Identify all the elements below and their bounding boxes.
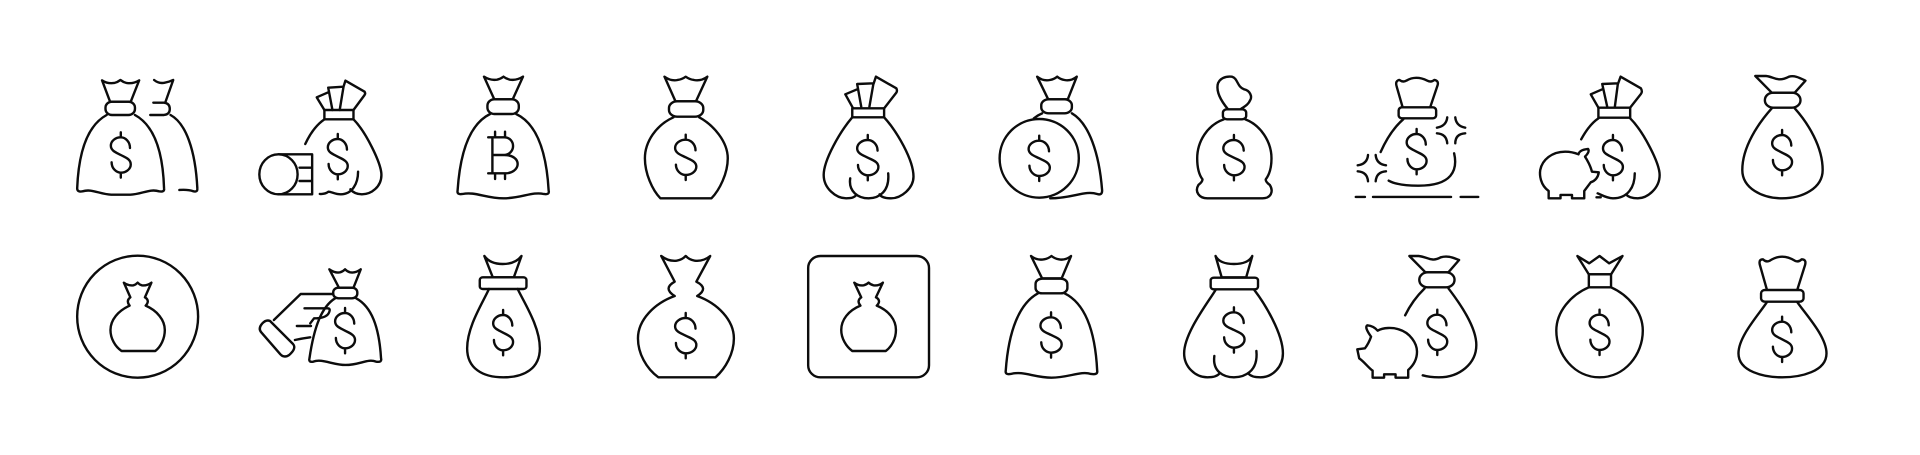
- icon: money bag with piggy bank: [1357, 256, 1476, 378]
- icon: bag with banknotes: [824, 77, 913, 198]
- icon: oval money bag with crown top: [1556, 256, 1643, 377]
- icon: hand holding money bag: [260, 269, 381, 365]
- icon: bag with large coin: [1000, 77, 1102, 198]
- icon: bag in rounded square: [808, 256, 929, 377]
- icon: bag with banknotes and piggy bank: [1540, 77, 1660, 198]
- icon: narrow money bag: [467, 256, 540, 377]
- icon: tied sack: [1197, 77, 1272, 198]
- icon: round money bag: [645, 77, 728, 198]
- icon: wide money bag: [638, 256, 734, 377]
- icon: squat money bag: [1738, 257, 1826, 377]
- icon: two money bags: [77, 80, 197, 195]
- icon: flared money bag: [1006, 256, 1097, 378]
- icon: teardrop money bag: [1742, 76, 1823, 198]
- icon: bag in circle: [77, 256, 198, 378]
- icon: lobed money bag: [1184, 256, 1283, 377]
- icon: bitcoin bag: [457, 77, 549, 198]
- icon: bag with banknotes and coin stack: [259, 81, 381, 194]
- icon: shiny bag with sparkles: [1356, 78, 1478, 197]
